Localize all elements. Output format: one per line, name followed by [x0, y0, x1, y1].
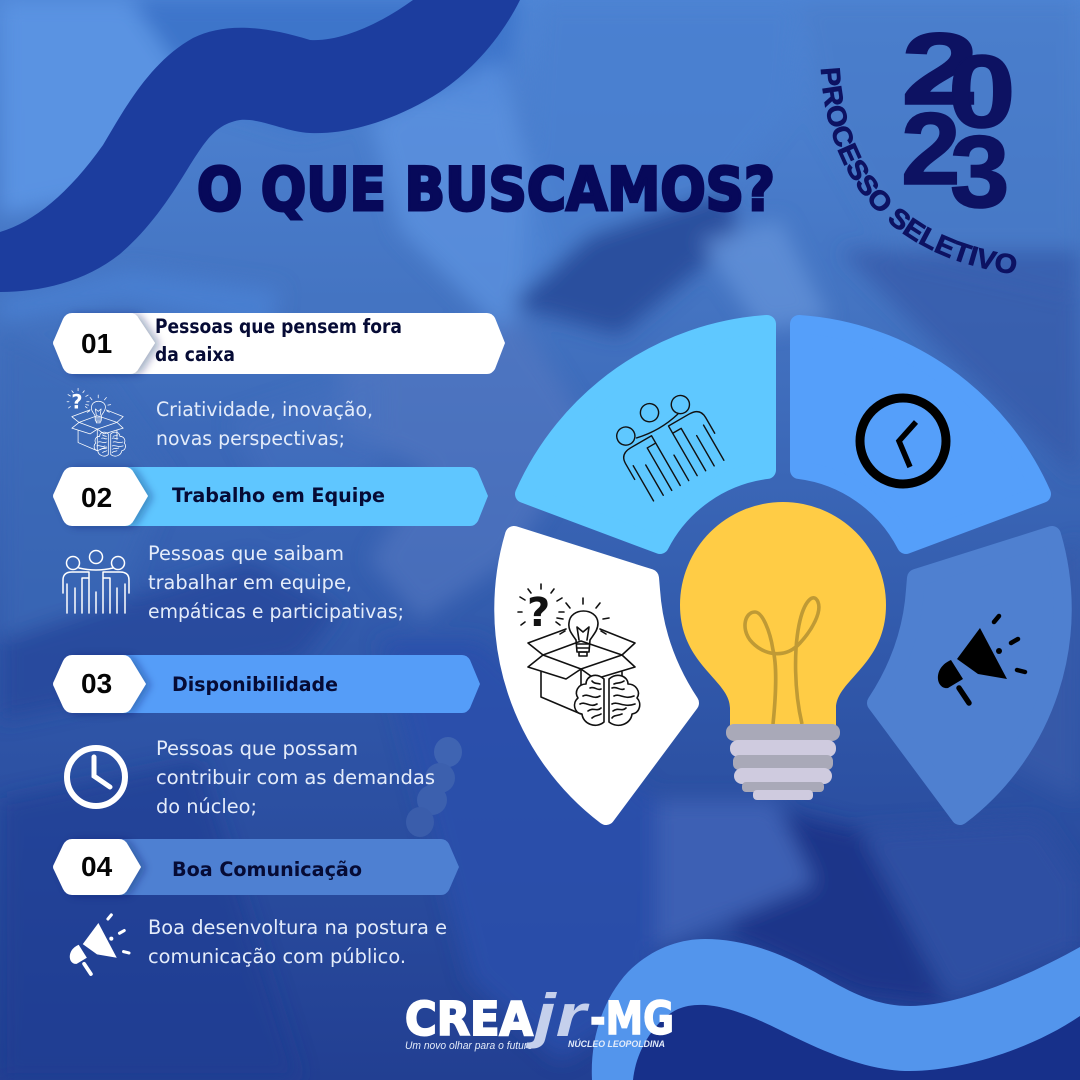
icon: team large	[605, 382, 729, 504]
row 02: trabalho em equipe: Trabalho em Equipe	[172, 484, 385, 507]
light bulb	[680, 502, 886, 800]
icon: megaphone large	[938, 616, 1025, 703]
badge: 2023 processo seletivo: PROCESSO SELETIVO	[820, 68, 1016, 274]
row 01: pessoas que pensem fora da caixa: 01	[81, 328, 112, 359]
badge: 2023 processo seletivo: 2	[901, 92, 961, 206]
segment: clock	[799, 324, 1042, 545]
row 03: disponibilidade: 03	[81, 668, 112, 699]
text: contribuir: Pessoas que possam	[156, 737, 358, 760]
text: trabalhar em equipe: trabalhar em equipe,	[148, 571, 352, 594]
row 04: boa comunicacao: 04	[81, 851, 113, 882]
icon: box and brain large: ?	[527, 590, 550, 636]
row 03: disponibilidade	[53, 655, 480, 713]
segment: communication	[876, 535, 1063, 816]
wave: top left	[0, 0, 520, 292]
logo: crea jr mg: CREA	[405, 992, 533, 1046]
text: contribuir: do núcleo;	[156, 795, 257, 818]
text: criatividade	[156, 398, 373, 450]
logo: crea jr mg: jr	[525, 982, 591, 1049]
row 04: boa comunicacao: Boa Comunicação	[172, 858, 362, 881]
icon: team small	[63, 550, 129, 613]
text: trabalhar em equipe: Pessoas que saibam	[148, 542, 344, 565]
badge: 2023 processo seletivo: 3	[950, 115, 1010, 229]
logo: crea jr mg: NÚCLEO LEOPOLDINA	[568, 1038, 665, 1050]
badge: 2023 processo seletivo: 2	[901, 11, 979, 126]
row 01: pessoas que pensem fora da caixa: Pessoas que pensem fora	[155, 315, 402, 338]
title: O QUE BUSCAMOS?	[197, 155, 775, 225]
text: criatividade: Criatividade, inovação,	[156, 398, 373, 421]
row 03: disponibilidade: Disponibilidade	[172, 673, 338, 696]
text: contribuir	[156, 737, 435, 818]
wave: bottom right	[592, 939, 1080, 1080]
text: trabalhar em equipe: empáticas e participativas;	[148, 600, 404, 623]
text: desenvoltura: comunicação com público.	[148, 945, 406, 968]
segment: team	[524, 324, 767, 545]
text: trabalhar em equipe	[148, 542, 404, 623]
row 01: pessoas que pensem fora da caixa: da caixa	[155, 343, 235, 366]
icon: box and brain small: ?	[71, 390, 83, 413]
row 01: pessoas que pensem fora da caixa	[53, 313, 505, 374]
icon: box and brain small	[67, 388, 125, 456]
badge: 2023 processo seletivo: 0	[948, 34, 1016, 149]
text: desenvoltura: Boa desenvoltura na postura e	[148, 916, 447, 939]
row 02: trabalho em equipe	[53, 467, 488, 526]
row 02: trabalho em equipe: 02	[81, 482, 112, 513]
segment: creative	[503, 535, 690, 816]
text: desenvoltura	[148, 916, 447, 968]
text: contribuir: contribuir com as demandas	[156, 766, 435, 789]
text: criatividade: novas perspectivas;	[156, 427, 345, 450]
row 04: boa comunicacao	[53, 839, 459, 895]
icon: box and brain large	[518, 584, 640, 725]
logo: crea jr mg: Um novo olhar para o futuro	[405, 1040, 533, 1052]
logo: crea jr mg: -MG	[590, 992, 674, 1045]
icon: megaphone small	[70, 915, 129, 974]
logo: crea jr mg	[405, 982, 674, 1052]
icon: clock small	[67, 748, 125, 806]
icon: clock large	[860, 398, 946, 484]
